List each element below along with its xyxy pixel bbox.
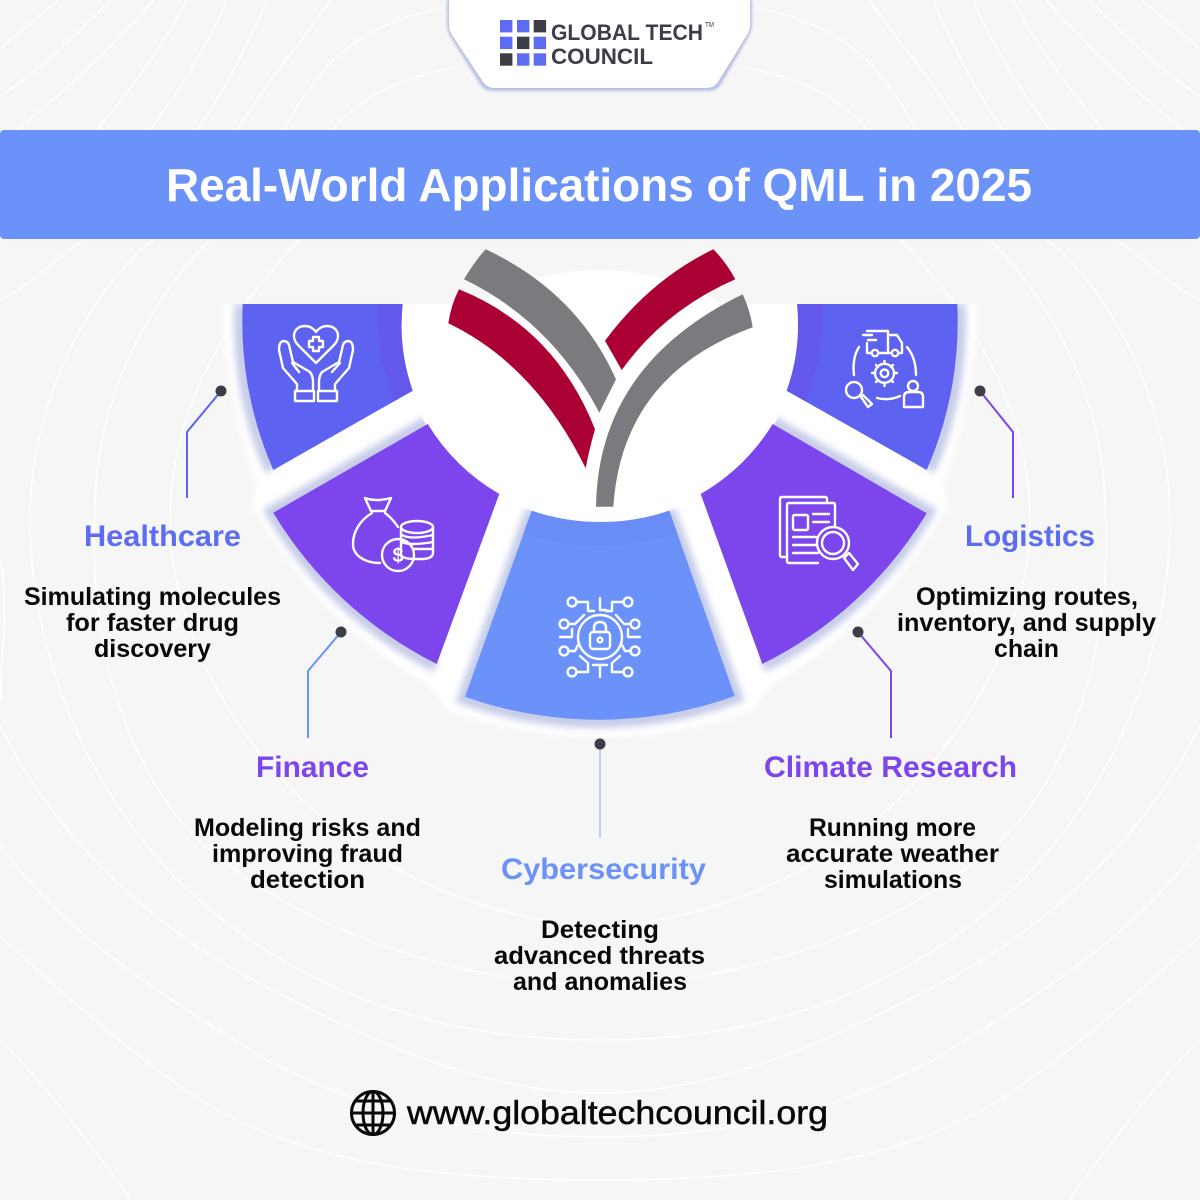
logo badge [447, 0, 752, 91]
text block: healthcare: Healthcare [84, 520, 241, 553]
wheel centre circle [421, 415, 779, 512]
text block: healthcare [24, 520, 281, 663]
panel: logistics wedge [786, 304, 958, 470]
text block: healthcare: for faster drug [66, 609, 239, 637]
panel: healthcare wedge [242, 304, 413, 470]
connector: healthcare [187, 386, 226, 498]
logo mark squares [500, 20, 546, 66]
text block: healthcare: discovery [94, 635, 211, 663]
text block: climate research: Climate Research [764, 751, 1017, 784]
logo wordmark: COUNCIL [551, 44, 653, 69]
text block: cybersecurity: Cybersecurity [501, 853, 706, 886]
text block: finance: improving fraud [212, 840, 403, 868]
text block: logistics [897, 520, 1156, 663]
text block: climate research [764, 751, 1017, 894]
text block: logistics: chain [994, 635, 1059, 663]
wedge shadows [241, 304, 959, 721]
connector: logistics [974, 386, 1013, 498]
text block: climate research: Running more [809, 814, 976, 842]
icon: hands holding heart [279, 326, 353, 401]
connector: cybersecurity [594, 738, 606, 838]
logo: red and grey leaves [448, 249, 753, 507]
panel: cybersecurity wedge [465, 510, 735, 720]
text block: logistics: inventory, and supply [897, 609, 1156, 637]
text block: climate research: accurate weather [786, 840, 999, 868]
title banner: Real-World Applications of QML in 2025 [166, 159, 1032, 211]
connector: finance [308, 626, 346, 738]
text block: cybersecurity: advanced threats [494, 942, 705, 970]
text block: cybersecurity [494, 853, 706, 996]
icon: money bag and coins: $ [392, 545, 404, 567]
text block: finance [194, 751, 421, 894]
icon: money bag and coins [353, 498, 433, 571]
text block: climate research: simulations [824, 866, 962, 894]
text block: finance: Finance [256, 751, 369, 784]
wheel white halo [222, 270, 978, 737]
icon: circuit padlock [560, 598, 640, 677]
logo wordmark [551, 20, 714, 69]
connector: climate research [852, 626, 891, 738]
title banner [0, 130, 1200, 239]
logo wordmark: GLOBAL TECH [551, 20, 703, 45]
footer website: www.globaltechcouncil.org [406, 1094, 828, 1131]
logo wordmark: TM [705, 22, 714, 29]
text block: logistics: Logistics [965, 520, 1095, 553]
text block: logistics: Optimizing routes, [916, 583, 1138, 611]
text block: finance: Modeling risks and [194, 814, 421, 842]
icon: globe [352, 1092, 394, 1134]
text block: cybersecurity: and anomalies [513, 968, 687, 996]
text block: finance: detection [250, 866, 365, 894]
panel: finance wedge [273, 424, 499, 664]
icon: documents with magnifier [780, 497, 858, 570]
icon: truck, gear, search and person [846, 331, 923, 407]
text block: cybersecurity: Detecting [541, 916, 659, 944]
text block: healthcare: Simulating molecules [24, 583, 281, 611]
panel: climate research wedge [701, 424, 927, 664]
